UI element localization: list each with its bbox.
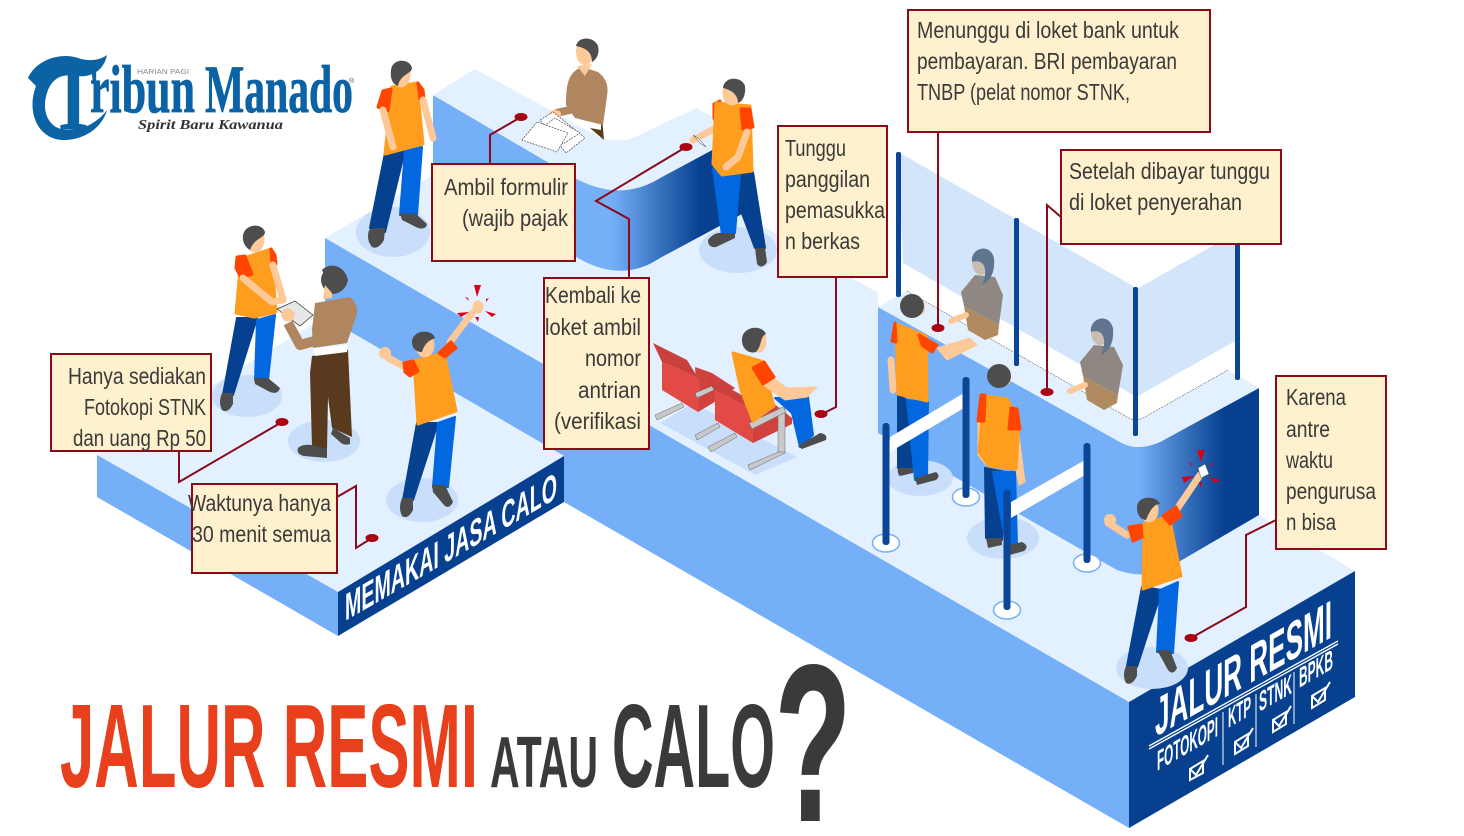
callout: kembali ke loket: antrian [578, 377, 641, 403]
logo: Tribun Manado [28, 37, 355, 152]
callout: hanya sediakan: Hanya sediakan [68, 363, 206, 389]
callout: kembali ke loket: nomor [585, 345, 641, 371]
callout: karena antre: pengurusa [1286, 478, 1376, 504]
callout: karena antre: Karena [1286, 384, 1346, 410]
person: man walking in, top left [356, 61, 433, 257]
logo: Tribun Manado: ® [349, 77, 355, 85]
title: ATAU [490, 723, 598, 803]
person: form clerk [549, 38, 608, 140]
callout: kembali ke loket [544, 278, 649, 449]
callout: tunggu panggilan [778, 126, 887, 277]
person: man raising receipt, calo path [380, 301, 483, 522]
person: teller one [951, 248, 1003, 340]
callout: karena antre: antre [1286, 416, 1330, 442]
logo: Tribun Manado: ribun [90, 51, 195, 127]
panel: jalur resmi checklist sign [1149, 589, 1338, 780]
callout: kembali ke loket: loket ambil [545, 314, 641, 340]
callout: waktunya hanya [188, 484, 337, 573]
callout: setelah dibayar: di loket penyerahan [1069, 189, 1242, 215]
person: teller two [1070, 318, 1123, 410]
callout: tunggu panggilan: n berkas [785, 228, 860, 254]
person: man at desk with ticket [693, 79, 777, 273]
icon: paper forms [522, 112, 585, 153]
callout: tunggu panggilan: pemasukka [785, 197, 885, 223]
callout: tunggu panggilan: Tunggu [785, 135, 846, 161]
platform: memakai jasa calo [97, 317, 564, 636]
panel: jalur resmi checklist sign: STNK [1259, 669, 1292, 718]
callout: waktunya hanya: 30 menit semua [192, 521, 331, 547]
icon: red burst right [1182, 450, 1220, 488]
person: broker with clipboard [277, 266, 360, 462]
connector: callout lines and dots [179, 113, 1276, 642]
callout: setelah dibayar: Setelah dibayar tunggu [1069, 158, 1270, 184]
callout: tunggu panggilan: panggilan [785, 166, 870, 192]
logo: Tribun Manado: Spirit Baru Kawanua [138, 118, 283, 133]
callout: hanya sediakan: Fotokopi STNK [84, 394, 207, 420]
icon: red burst left [457, 285, 496, 322]
callout: kembali ke loket: (verifikasi [554, 408, 641, 434]
glass poles [896, 152, 1240, 436]
person: man raising receipt, official path [1104, 464, 1209, 689]
queue stanchions and ribbons [872, 377, 1100, 619]
callout: menunggu di loket bank: pembayaran. BRI pembayaran [917, 48, 1177, 74]
counter: bank teller counter [878, 152, 1259, 574]
callout: menunggu di loket bank: TNBP (pelat nomor STNK, [917, 79, 1130, 105]
title [60, 620, 851, 836]
callout: setelah dibayar [1061, 150, 1281, 244]
title: CALO [612, 680, 775, 813]
logo: Tribun Manado: T [50, 37, 97, 152]
callout: kembali ke loket: Kembali ke [545, 282, 641, 308]
callout: ambil formulir: Ambil formulir [444, 174, 568, 200]
callout: ambil formulir [432, 164, 575, 261]
counter: form desk [433, 69, 742, 271]
chairs: waiting row [653, 343, 797, 475]
person: man handing documents to broker [212, 226, 283, 417]
callout: hanya sediakan [51, 354, 211, 451]
callout: menunggu di loket bank [908, 10, 1210, 132]
platform: jalur resmi main floor [325, 175, 1355, 828]
callout: ambil formulir: (wajib pajak [462, 205, 568, 231]
platform: memakai jasa calo: MEMAKAI JASA CALO [345, 464, 557, 629]
logo: Tribun Manado: HARIAN PAGI [137, 67, 189, 76]
callout: karena antre: n bisa [1286, 509, 1336, 535]
text: BPKB [1299, 644, 1333, 694]
callout: menunggu di loket bank: Menunggu di loket bank untuk [917, 17, 1179, 43]
panel: jalur resmi checklist sign: FOTOKOPI [1157, 712, 1218, 777]
panel: jalur resmi checklist sign: KTP [1228, 691, 1251, 734]
title: JALUR RESMI [60, 680, 478, 813]
person: seated man pointing [733, 328, 826, 449]
logo: Tribun Manado: Manado [205, 51, 353, 127]
callout: karena antre [1276, 376, 1386, 549]
callout: karena antre: waktu [1285, 447, 1333, 473]
callout: waktunya hanya: Waktunya hanya [188, 490, 331, 516]
person: man queueing [967, 364, 1039, 559]
person: man at teller window [887, 294, 977, 496]
callout: hanya sediakan: dan uang Rp 50 [73, 425, 206, 451]
